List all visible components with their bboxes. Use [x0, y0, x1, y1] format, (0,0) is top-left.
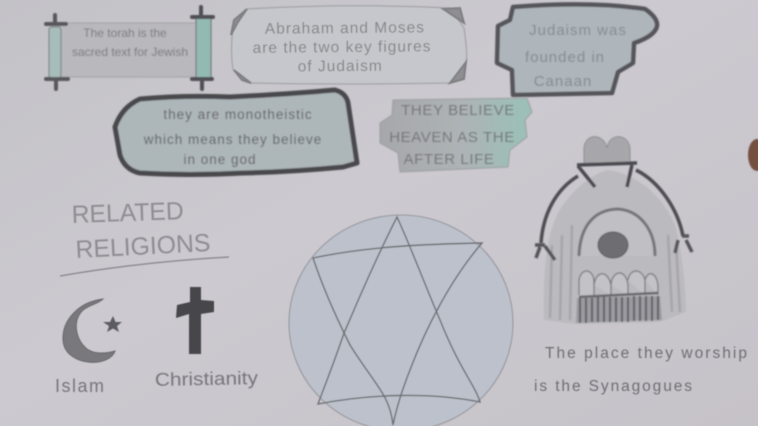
- text: heaven: HEAVEN AS THE: [389, 129, 515, 146]
- panel: heaven as the afterlife: [380, 98, 532, 172]
- text: place of worship: is the Synagogues: [534, 378, 692, 395]
- outer arch: [541, 170, 683, 243]
- building body: [544, 170, 686, 324]
- heading: related religions: RELIGIONS: [75, 229, 211, 264]
- text: Judaism founding: Judaism was: [529, 22, 627, 39]
- label: Islam: Islam: [55, 376, 106, 396]
- text: Abraham and Moses: of Judaism: [298, 58, 383, 75]
- text: Abraham and Moses: are the two key figures: [253, 38, 432, 57]
- roof bar: [577, 163, 637, 187]
- star up triangle: [318, 217, 480, 404]
- text: Judaism founding: founded in: [525, 49, 605, 66]
- panel: monotheistic: [115, 90, 357, 174]
- text: place of worship: The place they worship: [545, 345, 747, 362]
- shading columns: [550, 225, 680, 320]
- icon: crescent and star: [63, 299, 122, 362]
- panel: Abraham and Moses: [231, 6, 467, 84]
- heading: related religions: RELATED: [71, 197, 184, 229]
- panel: Judaism founded in Canaan: [497, 4, 657, 95]
- circle: [289, 215, 513, 426]
- icon: synagogue: [535, 137, 692, 324]
- chart-like drawing: star of David in circle: [289, 215, 513, 426]
- fringe: [576, 296, 662, 323]
- star down triangle: [313, 243, 482, 425]
- curtain ties: [535, 236, 692, 260]
- icon: right scroll roller: [192, 7, 213, 89]
- rosette: [598, 232, 628, 258]
- text: scroll: The torah is the: [83, 26, 167, 40]
- icon: left scroll roller: [46, 15, 68, 89]
- panel: torah scroll: [46, 7, 213, 89]
- tablets: [584, 137, 630, 163]
- text: Judaism founding: Canaan: [534, 73, 592, 90]
- icon: box corners: [231, 8, 466, 83]
- label: Christianity: Christianity: [155, 368, 258, 390]
- text: heaven: THEY BELIEVE: [401, 102, 515, 119]
- icon: cross: [176, 287, 214, 354]
- text: scroll: sacred text for Jewish: [72, 45, 188, 59]
- finger at edge: [748, 139, 758, 171]
- text: monotheistic: they are monotheistic: [163, 107, 313, 122]
- text: monotheistic: which means they believe: [143, 132, 322, 147]
- text: monotheistic: in one god: [183, 152, 257, 167]
- text: heaven: AFTER LIFE: [403, 151, 495, 168]
- text: Abraham and Moses: Abraham and Moses: [265, 19, 425, 38]
- heading: related religions: [60, 197, 229, 276]
- inner arch: [579, 209, 655, 256]
- window arches: [579, 271, 658, 295]
